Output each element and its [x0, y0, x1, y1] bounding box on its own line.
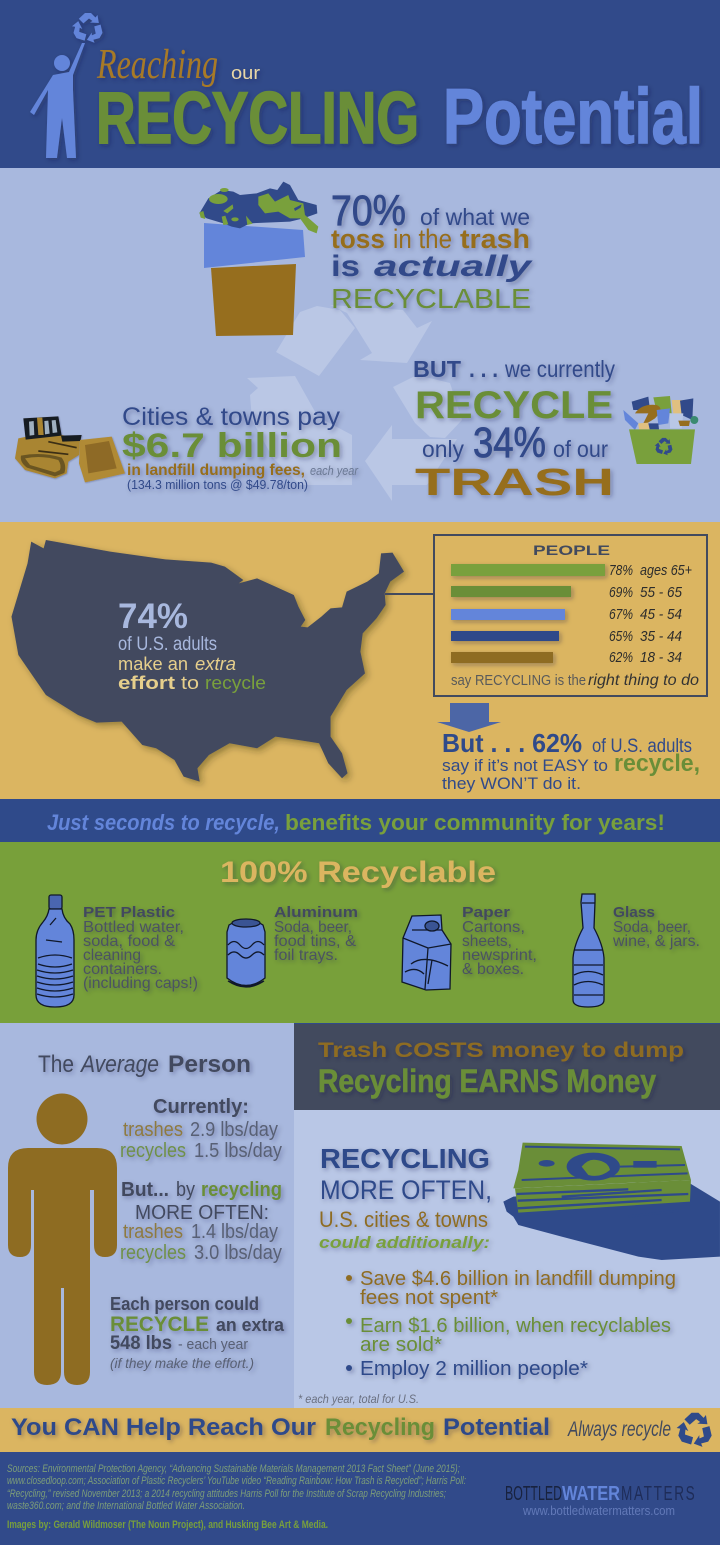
logo: Bottled Water Matters: MATTERS [621, 1482, 696, 1505]
text: PET plastic: (including caps!) [83, 975, 198, 992]
banner: you can help: Always recycle [567, 1418, 671, 1441]
text: by recycling more often: by [176, 1179, 195, 1201]
text: paper: Cartons, [462, 919, 525, 936]
heading: The [38, 1051, 74, 1078]
text: 74 percent: of U.S. adults [118, 634, 217, 655]
text: PET plastic: soda, food & [83, 933, 175, 950]
text: recycling more often heading: RECYCLING [320, 1143, 490, 1174]
chart: people bar chart: 65% [609, 628, 633, 645]
text: PET plastic: containers. [83, 961, 162, 978]
panel: 100 percent recyclable [0, 842, 720, 1023]
chart: people bar chart: 55 - 65 [640, 584, 683, 601]
heading [38, 1051, 251, 1078]
list: benefits: Employ 2 million people* [360, 1358, 588, 1380]
chart: people bar chart: 69% [609, 584, 633, 601]
banner: just seconds to recycle: Just seconds to recycle, [47, 810, 280, 835]
panel: people effort [0, 522, 720, 799]
text: by recycling more often: But... [121, 1179, 169, 1201]
text: but 62 percent: say if it’s not EASY to [442, 756, 608, 775]
panel: header [0, 0, 720, 168]
text: sources: waste360.com; and the International Bottled Water Association. [7, 1500, 245, 1512]
banner: you can help: Recycling [325, 1414, 435, 1441]
chart: people bar chart: 18 - 34 [640, 649, 682, 666]
text: landfill fees: each year [310, 463, 359, 478]
banner: you can help [0, 1408, 720, 1452]
text: 70 percent recyclable: is [331, 250, 360, 283]
text: landfill fees: $6.7 billion [122, 427, 342, 465]
panel: trash costs header: Trash COSTS money to dump [318, 1039, 684, 1062]
icon: paper carton [402, 915, 451, 990]
panel: trash facts [0, 168, 720, 522]
text: currently: Currently: [153, 1096, 249, 1118]
title [96, 42, 703, 160]
banner: you can help: Potential [443, 1414, 550, 1441]
list: benefits: Earn $1.6 billion, when recyclables [360, 1315, 671, 1337]
heading: Average [79, 1051, 159, 1078]
text: 74 percent: make an [118, 654, 188, 674]
text: aluminum: Aluminum [274, 904, 358, 921]
icon: recycling bin [623, 396, 698, 464]
chart: people bar chart: 62% [609, 649, 633, 666]
text: paper [462, 904, 537, 978]
footnote: * each year, total for U.S. [298, 1392, 419, 1406]
title: RECYCLING [96, 78, 419, 159]
chart: people bar chart: 35 - 44 [640, 628, 682, 645]
text: image credits: Images by: Gerald Wildmoser (The Noun Project), and Husking Bee Art & Media. [7, 1519, 328, 1531]
text: sources [7, 1463, 466, 1512]
text: sources: www.closedloop.com; Association of Plastic Recyclers’ YouTube video “Reading Rainbow: How Trash is Recycled”; Harris Poll: [7, 1475, 466, 1487]
chart: people bar chart: PEOPLE [533, 542, 610, 558]
text: we recycle only 34 percent: BUT [413, 356, 461, 382]
text: we recycle only 34 percent: . . . [469, 356, 498, 382]
text: aluminum: Soda, beer, [274, 919, 352, 936]
panel: recycling more often [294, 1110, 720, 1408]
text: each person could recycle: Each person could [110, 1294, 259, 1314]
text: each person could recycle: - each year [178, 1336, 248, 1353]
text: recycling more often heading: MORE OFTEN, [320, 1175, 492, 1205]
text: by recycling more often: MORE OFTEN: [135, 1202, 269, 1224]
text: 70 percent recyclable: of what we [420, 204, 530, 230]
text: recycling more often heading: U.S. cities & towns [319, 1207, 488, 1232]
text: paper: newsprint, [462, 947, 537, 964]
list: benefits: fees not spent* [360, 1287, 498, 1309]
text: by recycling more often: recycling [201, 1179, 282, 1201]
text: landfill fees [122, 403, 359, 492]
text: paper: sheets, [462, 933, 512, 950]
heading: 100% Recyclable [220, 856, 496, 889]
text: 70 percent recyclable: RECYCLABLE [331, 283, 531, 314]
icon: person reaching for recycling symbol [30, 13, 106, 158]
list: benefits: are sold* [360, 1334, 442, 1356]
icon: plastic bottle [36, 895, 74, 1007]
text: landfill fees: Cities & towns pay [122, 403, 341, 431]
text: glass: wine, & jars. [612, 933, 700, 950]
icon: glass bottle [573, 894, 604, 1007]
text: currently: trashes [123, 1119, 183, 1141]
text: recycling more often heading [319, 1143, 492, 1252]
chart: people bar chart: right thing to do [588, 672, 699, 689]
map: United States [11, 540, 404, 782]
text: each person could recycle: (if they make the effort.) [110, 1355, 254, 1371]
text: but 62 percent: of U.S. adults [592, 736, 692, 757]
text: each person could recycle: 548 lbs [110, 1333, 172, 1354]
text: aluminum [274, 904, 358, 964]
heading: Person [168, 1051, 251, 1078]
text: by recycling more often: 3.0 lbs/day [194, 1242, 282, 1264]
text: each person could recycle: an extra [216, 1315, 285, 1335]
text: 70 percent recyclable: toss [331, 224, 385, 254]
list: benefits: Save $4.6 billion in landfill dumping [360, 1268, 676, 1290]
banner: you can help: You CAN Help Reach Our [11, 1414, 316, 1441]
text: we recycle only 34 percent: 34% [473, 419, 546, 467]
chart: people bar chart: 45 - 54 [640, 606, 682, 623]
text: 70 percent recyclable: in the [393, 224, 452, 254]
text: we recycle only 34 percent: of our [553, 436, 608, 462]
text: we recycle only 34 percent: we currently [504, 356, 615, 382]
text: PET plastic: cleaning [83, 947, 141, 964]
panel: trash costs header: Recycling EARNS Money [318, 1063, 656, 1099]
text: by recycling more often: 1.4 lbs/day [191, 1221, 278, 1243]
text: recycling more often heading: could additionally: [319, 1233, 490, 1252]
text: PET plastic: Bottled water, [83, 919, 184, 936]
text: 70 percent recyclable: 70% [331, 187, 406, 235]
text: PET plastic: PET Plastic [83, 904, 175, 921]
text: paper: Paper [462, 904, 510, 921]
text: each person could recycle [110, 1294, 285, 1371]
text: currently: recycles [120, 1140, 186, 1162]
text: 74 percent [118, 597, 266, 693]
text: 74 percent: extra [195, 654, 236, 674]
text: currently: 1.5 lbs/day [194, 1140, 282, 1162]
text: glass: Soda, beer, [613, 919, 691, 936]
title: Reaching [96, 42, 218, 88]
text: each person could recycle: RECYCLE [110, 1313, 209, 1336]
text: but 62 percent: recycle, [614, 750, 700, 777]
text: we recycle only 34 percent: RECYCLE [415, 384, 613, 427]
text: sources: “Recycling,” revised November 2013; a 2014 recycling attitudes Harris Poll for the Institute of Scrap Recycling Industries; [7, 1488, 446, 1500]
text: 70 percent recyclable: actually [374, 250, 533, 283]
panel: footer [0, 1452, 720, 1545]
text: 74 percent: recycle [205, 673, 266, 693]
text: by recycling more often: trashes [123, 1221, 183, 1243]
chart: people bar chart: 78% [609, 562, 633, 579]
list: benefits [346, 1268, 676, 1380]
text: by recycling more often [120, 1179, 282, 1264]
text: currently: 2.9 lbs/day [190, 1119, 278, 1141]
text: glass [612, 904, 700, 950]
text: glass: Glass [613, 904, 655, 921]
logo: Bottled Water Matters: WATER [562, 1483, 620, 1505]
title: our [231, 63, 260, 83]
chart: people bar chart: 67% [609, 606, 633, 623]
icon: large faint recycling symbol [247, 305, 462, 501]
text: by recycling more often: recycles [120, 1242, 186, 1264]
text: sources: Sources: Environmental Protection Agency, “Advancing Sustainable Materials Management 2013 Fact Sheet” (June 2015); [7, 1463, 460, 1475]
text: 70 percent recyclable [331, 187, 533, 314]
panel: the average person [0, 1023, 294, 1408]
icon: bulldozer [15, 416, 125, 482]
chart: people bar chart: ages 65+ [640, 562, 692, 579]
icon: recycling symbol [674, 1413, 715, 1449]
logo: Bottled Water Matters: www.bottledwatermatters.com [522, 1503, 675, 1518]
banner: just seconds to recycle: benefits your community for years! [285, 810, 665, 835]
arrow: down [437, 703, 501, 732]
text: PET plastic [83, 904, 198, 992]
logo: Bottled Water Matters [505, 1482, 696, 1518]
text: 74 percent: to [181, 673, 199, 693]
text: we recycle only 34 percent: TRASH [415, 462, 614, 504]
icon: overflowing trash can [199, 182, 318, 336]
text: aluminum: food tins, & [274, 933, 356, 950]
text: we recycle only 34 percent: only [422, 436, 464, 462]
logo: Bottled Water Matters: BOTTLED [505, 1483, 562, 1505]
chart: people bar chart [434, 535, 707, 696]
text: we recycle only 34 percent [413, 356, 615, 504]
text: currently [120, 1096, 282, 1162]
text: paper: & boxes. [462, 961, 524, 978]
text: aluminum: foil trays. [274, 947, 338, 964]
icon: aluminum can [227, 919, 265, 987]
text: but 62 percent: But . . . 62% [442, 728, 582, 758]
text: 70 percent recyclable: trash [460, 224, 530, 254]
connector line [385, 593, 434, 595]
banner: just seconds to recycle [0, 799, 720, 842]
icon: hand holding money [503, 1143, 720, 1260]
text: 74 percent: 74% [118, 597, 188, 636]
icon: person figure [8, 1094, 117, 1385]
text: landfill fees: in landfill dumping fees, [127, 462, 305, 479]
text: landfill fees: (134.3 million tons @ $49.78/ton) [127, 477, 308, 492]
text: 74 percent: effort [118, 673, 175, 693]
text: but 62 percent [442, 728, 700, 793]
chart: people bar chart: say RECYCLING is the [451, 672, 586, 689]
panel: trash costs header [294, 1024, 720, 1110]
text: but 62 percent: they WON’T do it. [442, 774, 581, 793]
